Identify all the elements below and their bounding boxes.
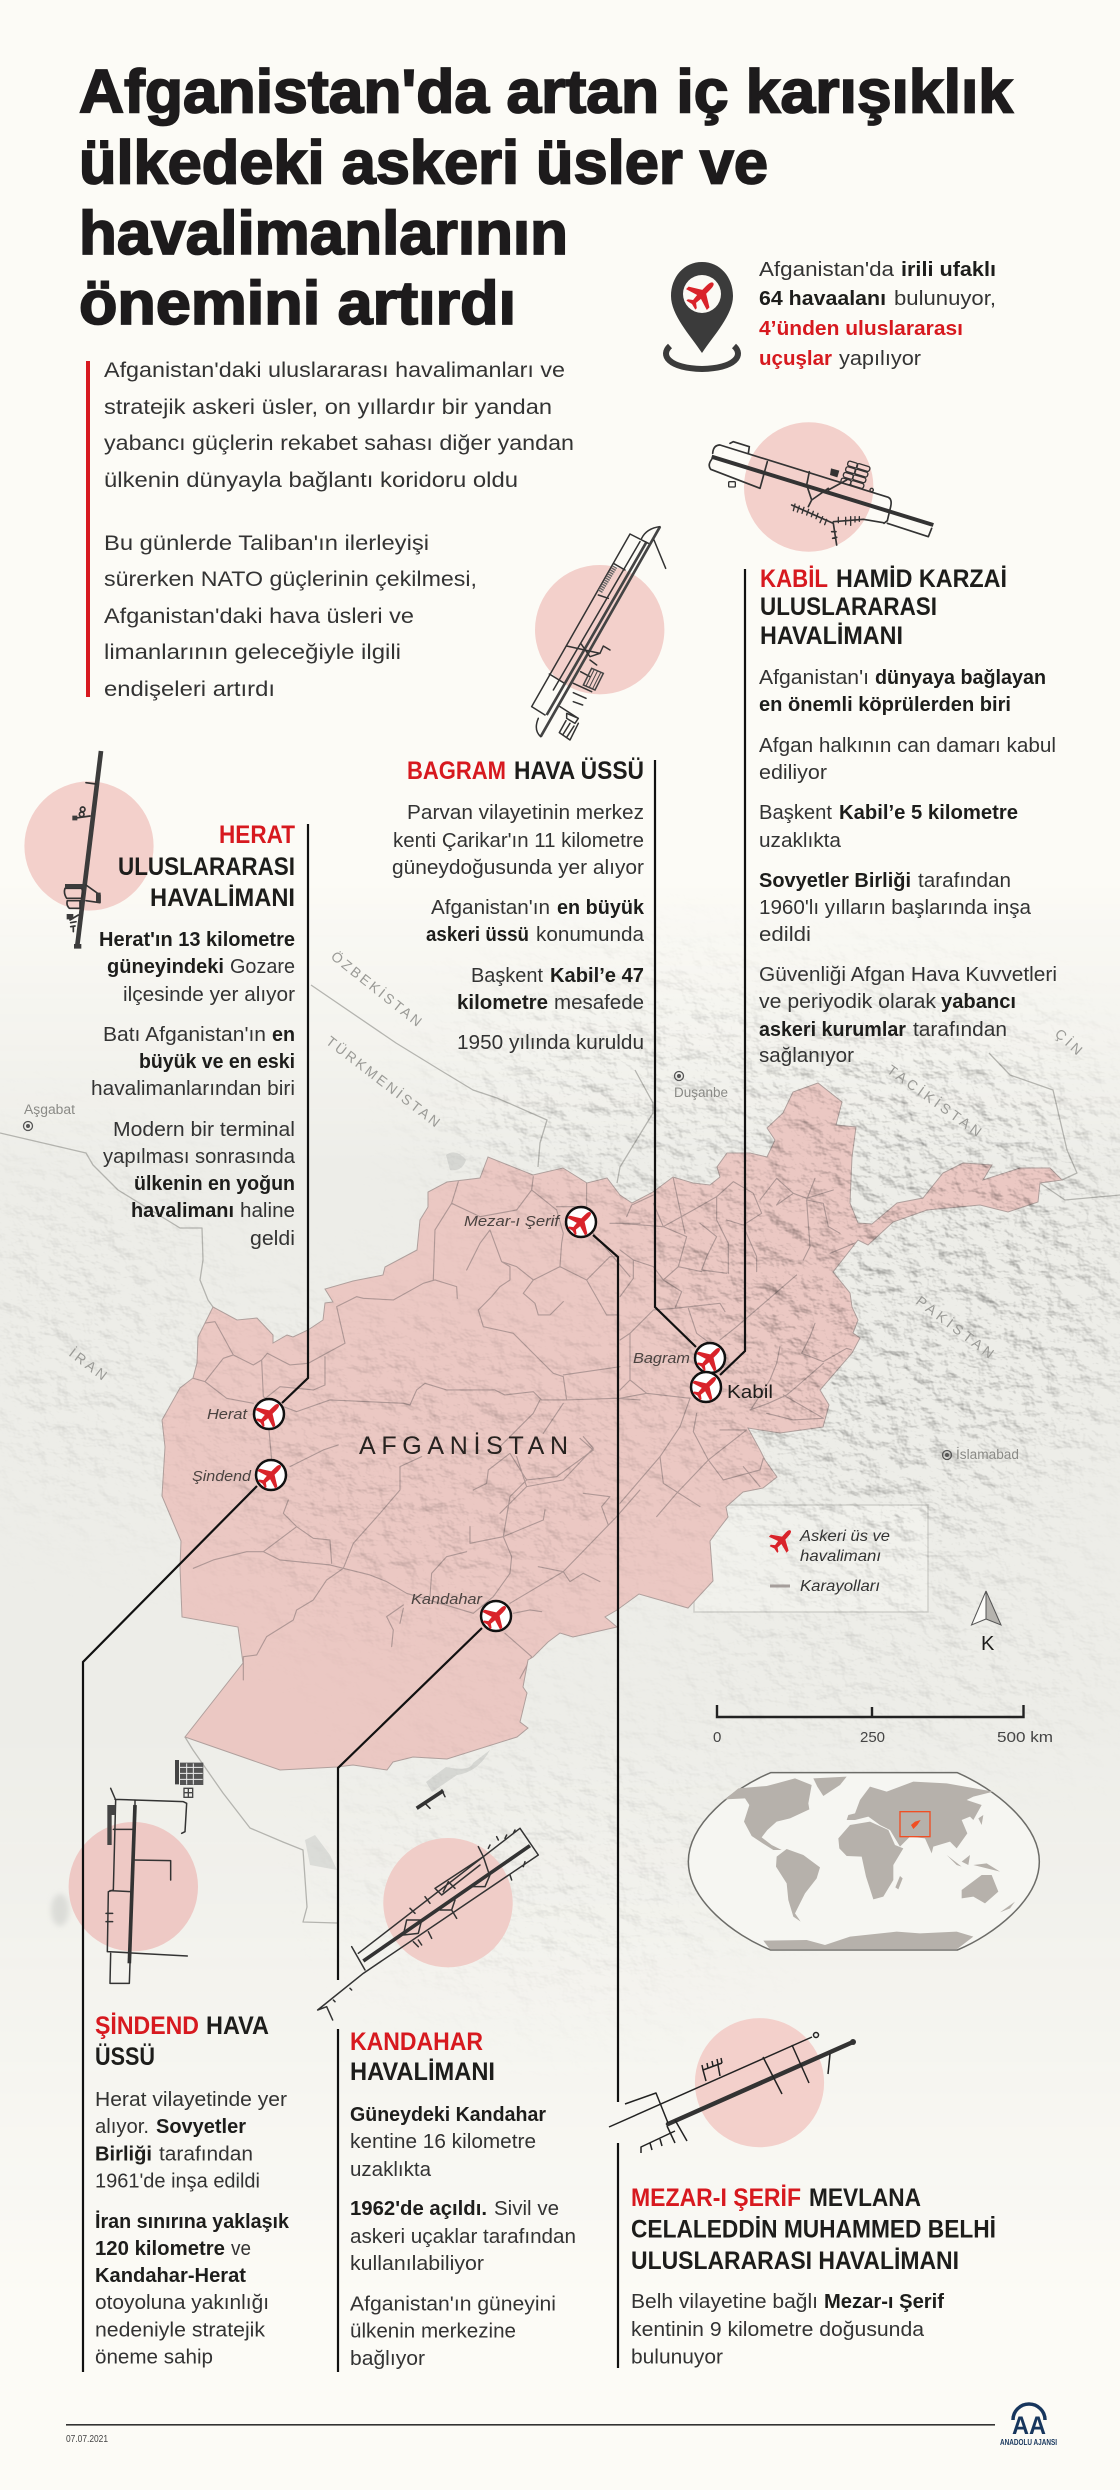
body text: Afganistan'ı xyxy=(759,667,869,689)
airport plan: Kabil xyxy=(709,422,933,552)
logo: Anadolu Ajansı xyxy=(1000,2404,1057,2447)
heading: MEVLANA xyxy=(809,2184,921,2212)
airport plan: Bagram xyxy=(532,527,666,740)
panel: Kandahar airport xyxy=(318,1628,576,2372)
body text: Batı Afganistan'ın xyxy=(103,1024,266,1046)
salt lakes xyxy=(51,1152,490,1926)
body text: tarafından xyxy=(913,1019,1007,1041)
body text: Herat'ın 13 kilometre xyxy=(99,929,295,951)
body text: kentine 16 kilometre xyxy=(350,2131,536,2153)
body text: büyük ve en eski xyxy=(139,1051,295,1073)
intro text with red bar: Afganistan'daki uluslararası havalimanları ve xyxy=(104,359,565,382)
body text: Afganistan'ın güneyini xyxy=(350,2294,556,2316)
body text: uzaklıkta xyxy=(350,2159,432,2181)
intro text with red bar: Bu günlerde Taliban'ın ilerleyişi xyxy=(104,532,429,555)
body text: ilçesinde yer alıyor xyxy=(123,984,295,1006)
title xyxy=(79,58,1013,337)
body text: Mezar-ı Şerif xyxy=(824,2291,944,2313)
body text: askeri kurumlar xyxy=(759,1019,906,1041)
intro text with red bar xyxy=(86,359,574,701)
body text: Birliği xyxy=(95,2144,152,2166)
scale bar: 0 xyxy=(713,1729,721,1746)
capital İslamabad: İslamabad xyxy=(956,1447,1019,1462)
intro text with red bar: ülkenin dünyayla bağlantı koridoru oldu xyxy=(104,469,518,492)
body text: kilometre xyxy=(457,992,548,1014)
locator world map xyxy=(688,1773,1039,1950)
marker: Herat xyxy=(251,1396,287,1432)
body text: Güvenliği Afgan Hava Kuvvetleri xyxy=(759,964,1057,986)
title: havalimanlarının xyxy=(79,199,568,267)
body text: en büyük xyxy=(557,897,645,919)
body text: Modern bir terminal xyxy=(113,1119,295,1141)
city labels: Şindend xyxy=(192,1468,252,1485)
country name labels xyxy=(66,947,1087,1384)
body text: 1960'lı yılların başlarında inşa xyxy=(759,897,1032,919)
heading: KABİL xyxy=(760,565,828,593)
heading xyxy=(118,821,295,912)
body text: askeri üssü xyxy=(426,924,529,946)
footer rule xyxy=(66,2424,995,2426)
body text: haline xyxy=(240,1200,295,1222)
capital Duşanbe xyxy=(674,1072,728,1100)
leader line, lower part xyxy=(337,2029,339,2372)
date: 07.07.2021 xyxy=(66,2434,108,2445)
capital Aşgabat xyxy=(24,1102,75,1130)
intro text with red bar: sürerken NATO güçlerinin çekilmesi, xyxy=(104,568,477,591)
heading xyxy=(350,2028,495,2086)
country name labels: TÜRKMENİSTAN xyxy=(323,1032,445,1131)
heading: HAVALİMANI xyxy=(760,622,903,650)
body text: Sovyetler Birliği xyxy=(759,870,911,892)
heading: ŞİNDEND xyxy=(95,2012,199,2040)
body text: Güneydeki Kandahar xyxy=(350,2104,546,2126)
heading xyxy=(407,756,644,785)
body text: Afgan halkının can damarı kabul xyxy=(759,735,1056,757)
body text: tarafından xyxy=(159,2144,253,2166)
body text: öneme sahip xyxy=(95,2346,213,2368)
country name labels: ÇİN xyxy=(1052,1025,1087,1059)
leader line xyxy=(282,824,308,1403)
body text: edildi xyxy=(759,924,811,946)
heading: ULUSLARARASI xyxy=(118,853,295,881)
heading: ULUSLARARASI HAVALİMANI xyxy=(631,2247,959,2275)
body text: 1961'de inşa edildi xyxy=(95,2170,260,2192)
roads xyxy=(193,1177,858,1680)
city labels: Kandahar xyxy=(411,1591,483,1608)
leader line, upper part xyxy=(338,1628,482,1980)
title: Afganistan'da artan iç karışıklık xyxy=(79,58,1013,126)
heading xyxy=(95,2012,269,2071)
intro text with red bar: stratejik askeri üsler, on yıllardır bir yandan xyxy=(104,396,552,419)
body text xyxy=(95,2089,290,2368)
heading: CELALEDDİN MUHAMMED BELHİ xyxy=(631,2216,996,2244)
body text: tarafından xyxy=(918,870,1011,892)
airport plan: Kandahar xyxy=(318,1790,538,2020)
airport plan: Herat xyxy=(24,751,154,949)
scale bar xyxy=(713,1705,1053,1746)
logo: Anadolu Ajansı: AA xyxy=(1012,2412,1046,2440)
north arrow xyxy=(972,1591,1001,1655)
callout: 64 airports: bulunuyor, xyxy=(894,288,996,310)
marker: Kandahar xyxy=(478,1598,514,1634)
scale bar: 250 xyxy=(860,1729,885,1746)
panel: Mezar-ı Şerif airport xyxy=(593,1235,996,2368)
body text: Parvan vilayetinin merkez xyxy=(407,802,644,824)
heading: HAMİD KARZAİ xyxy=(836,565,1007,593)
body text: havalimanlarından biri xyxy=(91,1078,295,1100)
callout: 64 airports: yapılıyor xyxy=(839,348,921,370)
callout: 64 airports: Afganistan'da xyxy=(759,259,895,281)
body text: sağlanıyor xyxy=(759,1045,854,1067)
city labels: Mezar-ı Şerif xyxy=(464,1213,561,1230)
map base tone xyxy=(0,1045,1120,1970)
body text: güneyindeki xyxy=(107,956,224,978)
country name labels: PAKİSTAN xyxy=(913,1292,998,1362)
body text: Başkent xyxy=(759,802,832,824)
body text: Herat vilayetinde yer xyxy=(95,2089,287,2111)
body text: kentinin 9 kilometre doğusunda xyxy=(631,2319,925,2341)
leader line xyxy=(720,569,745,1375)
icon: location pin with plane xyxy=(666,262,738,369)
heading: MEZAR-I ŞERİF xyxy=(631,2184,801,2212)
heading: ULUSLARARASI xyxy=(760,593,937,621)
country name labels: İRAN xyxy=(66,1344,112,1384)
marker: Mezar-ı Şerif xyxy=(563,1204,599,1240)
legend: havalimanı xyxy=(800,1548,881,1565)
heading: HAVA ÜSSÜ xyxy=(514,756,644,785)
intro text with red bar: Afganistan'daki hava üsleri ve xyxy=(104,605,414,628)
body text: yabancı xyxy=(941,991,1016,1013)
body text: kullanılabiliyor xyxy=(350,2253,484,2275)
body text xyxy=(350,2104,576,2370)
city labels: Herat xyxy=(207,1406,248,1423)
body text: Kabil’e 47 xyxy=(550,965,644,987)
body text: Başkent xyxy=(471,965,543,987)
body text: bağlıyor xyxy=(350,2348,425,2370)
panel: Şindend air base xyxy=(69,1486,290,2372)
marker: Bagram xyxy=(692,1340,728,1376)
body text: en önemli köprülerden biri xyxy=(759,694,1011,716)
body text: güneydoğusunda yer alıyor xyxy=(392,857,644,879)
body text: ve periyodik olarak xyxy=(759,991,937,1013)
body text: havalimanı xyxy=(131,1200,234,1222)
body text: 120 kilometre xyxy=(95,2238,225,2260)
body text xyxy=(392,802,645,1054)
marker: Kabil xyxy=(688,1369,724,1405)
heading: HERAT xyxy=(219,821,295,849)
title: ülkedeki askeri üsler ve xyxy=(79,128,768,196)
country name labels: TACİKİSTAN xyxy=(884,1061,986,1140)
north arrow: K xyxy=(981,1633,995,1655)
body text xyxy=(91,929,296,1250)
callout: 64 airports xyxy=(666,259,996,370)
country name labels: ÖZBEKİSTAN xyxy=(328,947,426,1030)
city labels xyxy=(192,1213,773,1608)
body text: Sivil ve xyxy=(494,2198,559,2220)
heading: KANDAHAR xyxy=(350,2028,483,2056)
map markers xyxy=(251,1204,728,1634)
callout: 64 airports: 64 havaalanı xyxy=(759,288,886,310)
body text: ülkenin en yoğun xyxy=(134,1173,295,1195)
legend: Karayolları xyxy=(800,1578,880,1595)
leader line, lower part xyxy=(617,2143,619,2368)
body text: Gozare xyxy=(230,956,295,978)
terrain relief xyxy=(0,946,1120,1976)
heading xyxy=(631,2184,996,2275)
Afghanistan territory xyxy=(162,1083,1062,1770)
map: Afghanistan and neighbours xyxy=(0,935,1120,2053)
body text: uzaklıkta xyxy=(759,830,842,852)
body text: geldi xyxy=(250,1228,295,1250)
legend box xyxy=(694,1505,928,1612)
body text: İran sınırına yaklaşık xyxy=(95,2210,290,2233)
panel: Kabil Hamid Karzai airport xyxy=(709,422,1057,1375)
country label Afganistan: AFGANİSTAN xyxy=(359,1431,568,1460)
body text: dünyaya bağlayan xyxy=(875,667,1046,689)
capital Aşgabat: Aşgabat xyxy=(24,1102,75,1117)
body text: nedeniyle stratejik xyxy=(95,2320,266,2342)
panel: Herat airport xyxy=(24,751,308,1403)
legend xyxy=(765,1523,890,1595)
body text: 1962'de açıldı. xyxy=(350,2198,487,2220)
body text: bulunuyor xyxy=(631,2346,723,2368)
neighbouring country borders xyxy=(0,985,1120,1923)
callout: 64 airports: irili ufaklı xyxy=(901,259,996,281)
body text: ediliyor xyxy=(759,762,827,784)
callout: 64 airports: 4’ünden uluslararası xyxy=(759,318,963,340)
heading: HAVALİMANI xyxy=(150,884,295,912)
heading: BAGRAM xyxy=(407,757,506,785)
leader line xyxy=(83,1486,257,2372)
body text: Sovyetler xyxy=(156,2116,246,2138)
body text xyxy=(759,667,1057,1067)
body text: Afganistan'ın xyxy=(431,897,550,919)
body text: Kabil’e 5 kilometre xyxy=(839,802,1018,824)
body text: konumunda xyxy=(536,924,645,946)
heading: ÜSSÜ xyxy=(95,2042,155,2071)
legend: Askeri üs ve xyxy=(799,1528,890,1545)
body text xyxy=(631,2291,944,2368)
heading xyxy=(760,565,1007,650)
body text: askeri uçaklar tarafından xyxy=(350,2226,576,2248)
body text: Kandahar-Herat xyxy=(95,2265,246,2287)
body text: en xyxy=(272,1024,295,1046)
scale bar: 500 km xyxy=(997,1729,1053,1746)
marker: Şindend xyxy=(253,1457,289,1493)
leader line xyxy=(655,760,696,1347)
heading: HAVA xyxy=(206,2012,269,2040)
body text: ülkenin merkezine xyxy=(350,2320,516,2342)
leader line, upper part xyxy=(593,1235,618,2102)
capital Duşanbe: Duşanbe xyxy=(674,1085,728,1100)
city labels: Bagram xyxy=(633,1350,690,1367)
intro text with red bar: yabancı güçlerin rekabet sahası diğer yandan xyxy=(104,432,574,455)
body text: ve xyxy=(231,2238,251,2260)
heading: HAVALİMANI xyxy=(350,2058,495,2086)
intro text with red bar: endişeleri artırdı xyxy=(104,678,275,701)
body text: mesafede xyxy=(554,992,644,1014)
callout: 64 airports: uçuşlar xyxy=(759,348,832,370)
body text: 1950 yılında kuruldu xyxy=(457,1032,644,1054)
body text: kenti Çarikar'ın 11 kilometre xyxy=(393,830,644,852)
title: önemini artırdı xyxy=(79,269,516,337)
panel: Bagram air base xyxy=(392,527,696,1347)
city labels: Kabil xyxy=(727,1382,773,1402)
intro text with red bar: limanlarının geleceğiyle ilgili xyxy=(104,641,401,664)
logo: Anadolu Ajansı: ANADOLU AJANSI xyxy=(1000,2437,1057,2447)
body text: otoyoluna yakınlığı xyxy=(95,2292,269,2314)
body text: Belh vilayetine bağlı xyxy=(631,2291,818,2313)
body text: alıyor. xyxy=(95,2116,149,2138)
airport plan: Şindend xyxy=(69,1760,203,1983)
airport plan: Mezar-ı Şerif xyxy=(609,2018,856,2153)
body text: yapılması sonrasında xyxy=(103,1146,296,1168)
